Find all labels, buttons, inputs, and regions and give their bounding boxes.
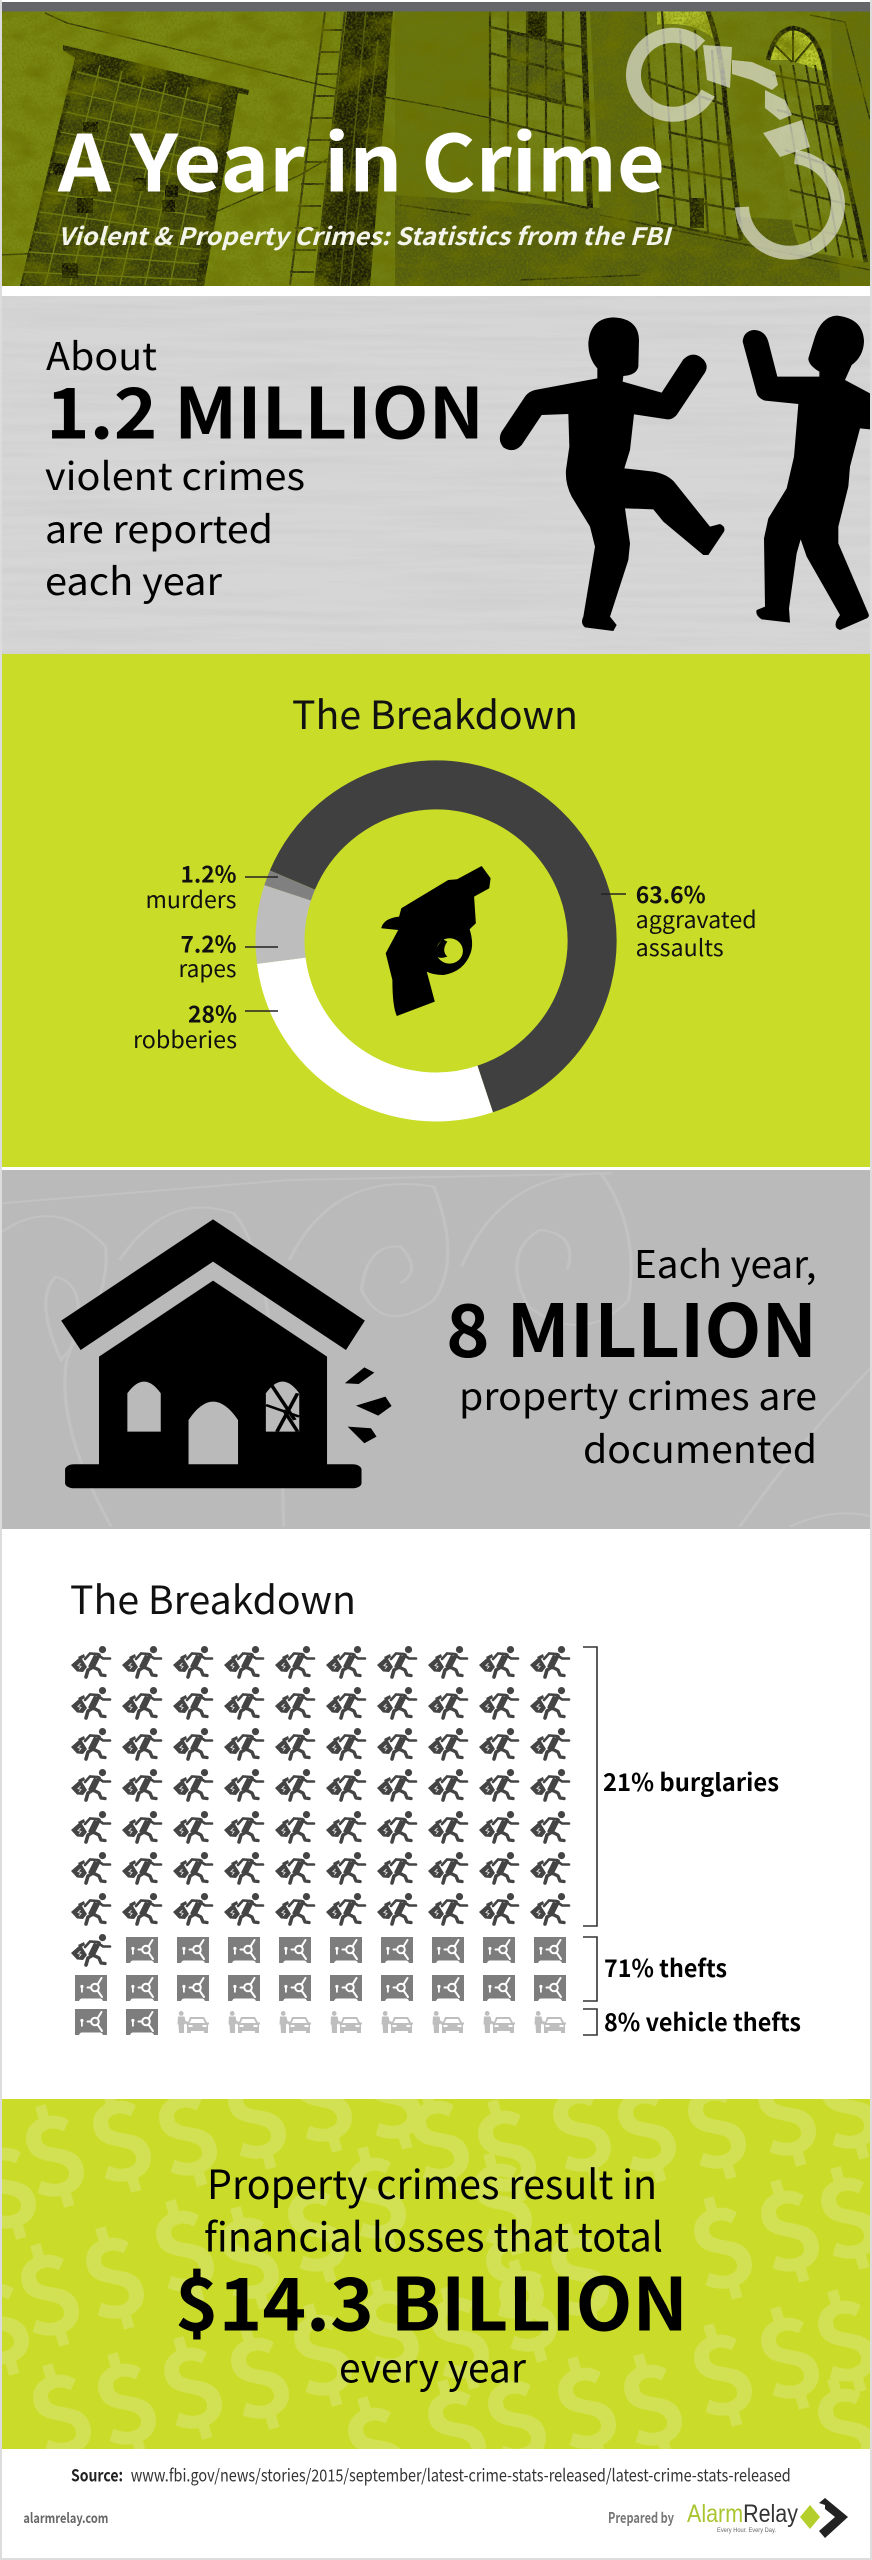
panel: financial losses: $ bbox=[61, 2188, 165, 2355]
panel: financial losses: $ bbox=[323, 2358, 427, 2525]
label: robberies: robberies bbox=[133, 1021, 237, 1055]
panel: financial losses: $ bbox=[1, 2066, 105, 2233]
text block: about 1.2 million violent crimes: are reported bbox=[45, 499, 273, 554]
label: burglaries: 21% burglaries bbox=[603, 1763, 779, 1798]
panel: financial losses: $ bbox=[599, 2315, 703, 2482]
text block: about 1.2 million violent crimes bbox=[45, 326, 484, 606]
donut chart bbox=[280, 785, 592, 1097]
icon: handcuffs bbox=[633, 35, 838, 253]
label: aggravated assaults: aggravated bbox=[636, 901, 757, 935]
panel: financial losses: $ bbox=[139, 2298, 243, 2465]
panel: financial losses: $ bbox=[203, 2028, 307, 2195]
top gray bar bbox=[0, 2, 872, 12]
text block: 14.3 billion: financial losses that total bbox=[204, 2206, 663, 2264]
ladder and pipe bbox=[315, 11, 393, 286]
panel: financial losses: $ bbox=[736, 2141, 840, 2308]
panel: financial losses: $ bbox=[593, 2041, 697, 2208]
text block: 14.3 billion: $14.3 BILLION bbox=[175, 2247, 688, 2353]
window two bbox=[651, 116, 738, 238]
icon: revolver bbox=[381, 866, 491, 1016]
logo: AlarmRelay bbox=[687, 2498, 848, 2538]
prepared by label: Prepared by bbox=[608, 2507, 675, 2528]
heading: The Breakdown bbox=[70, 1570, 356, 1626]
panel: property crimes breakdown bbox=[70, 1570, 801, 2038]
label: rapes bbox=[178, 926, 236, 984]
text block: 14.3 billion bbox=[175, 2153, 688, 2395]
panel: financial losses: $ bbox=[733, 2025, 837, 2192]
panel: property crimes bbox=[0, 1170, 872, 1529]
panel: financial losses: $ bbox=[263, 2141, 367, 2308]
label: rapes: rapes bbox=[178, 950, 236, 984]
panel: financial losses: $ bbox=[461, 2188, 565, 2355]
panel: financial losses: $ bbox=[206, 2288, 310, 2455]
panel: financial losses: $ bbox=[131, 2161, 235, 2328]
panel: financial losses: $ bbox=[403, 2341, 507, 2508]
label: aggravated assaults bbox=[636, 876, 757, 963]
panel: financial losses: $ bbox=[533, 2318, 637, 2485]
source line: Source: bbox=[71, 2462, 123, 2487]
footer site name: alarmrelay.com bbox=[23, 2507, 108, 2527]
barred door bbox=[20, 45, 249, 286]
panel: financial losses: $ bbox=[453, 2061, 557, 2228]
text block: 14.3 billion: every year bbox=[339, 2337, 526, 2395]
icon: burgled house bbox=[61, 1219, 392, 1488]
label: thefts: 71% thefts bbox=[604, 1949, 727, 1984]
label: robberies: 28% bbox=[188, 996, 237, 1030]
brackets bbox=[583, 1647, 597, 2035]
pictogram: burglaries bbox=[71, 1646, 569, 1965]
text block: 8 million property crimes bbox=[446, 1234, 817, 1474]
text block: about 1.2 million violent crimes: 1.2 MILLION bbox=[46, 358, 484, 460]
label: murders: murders bbox=[146, 881, 236, 915]
text block: 8 million property crimes: property crimes are bbox=[459, 1366, 817, 1421]
panel: violent crimes bbox=[0, 296, 872, 655]
panel: financial losses: $ bbox=[386, 2051, 490, 2218]
window one bbox=[490, 11, 588, 208]
panel: financial losses: $ bbox=[339, 2008, 443, 2175]
panel: financial losses bbox=[2, 2099, 870, 2449]
panel: financial losses: $ bbox=[8, 2325, 112, 2492]
icon: two fighting figures bbox=[500, 316, 870, 631]
text block: 8 million property crimes: documented bbox=[583, 1419, 817, 1474]
panel: financial losses: $ bbox=[669, 2158, 773, 2325]
panel: financial losses: $ bbox=[336, 2241, 440, 2408]
label: vehicle thefts: 8% vehicle thefts bbox=[604, 2003, 801, 2038]
subtitle: Violent & Property Crimes: Statistics from the FBI bbox=[58, 217, 673, 252]
logo: AlarmRelay: Every Hour. Every Day. bbox=[717, 2528, 776, 2534]
panel: financial losses: $ bbox=[269, 2265, 373, 2432]
panel: financial losses: $ bbox=[474, 2221, 578, 2388]
panel: financial losses: $ bbox=[669, 2285, 773, 2452]
panel: financial losses: $ bbox=[73, 2314, 177, 2481]
pictogram: thefts bbox=[75, 1937, 566, 2035]
panel: financial losses: $ bbox=[526, 2185, 630, 2352]
panel: financial losses: $ bbox=[134, 2045, 238, 2212]
logo: AlarmRelay: AlarmRelay bbox=[687, 2500, 798, 2528]
wall texture bbox=[0, 11, 872, 286]
text block: 8 million property crimes: Each year, bbox=[634, 1234, 816, 1289]
panel: financial losses: $ bbox=[68, 2051, 172, 2218]
text block: 14.3 billion: Property crimes result in bbox=[207, 2153, 657, 2211]
panel: violent crimes breakdown bbox=[0, 654, 872, 1167]
panel: financial losses: $ bbox=[528, 2041, 632, 2208]
text block: about 1.2 million violent crimes: violent crimes bbox=[45, 446, 305, 501]
wall cracks bbox=[0, 13, 870, 280]
heading: The Breakdown bbox=[292, 685, 578, 741]
label: rapes: 7.2% bbox=[180, 926, 236, 960]
panel: financial losses: $ bbox=[449, 2114, 553, 2281]
panel: financial losses: $ bbox=[736, 2268, 840, 2435]
label: aggravated assaults: 63.6% bbox=[636, 876, 706, 910]
panel: financial losses: $ bbox=[663, 2038, 767, 2205]
panel: header photo banner bbox=[0, 11, 872, 286]
panel: financial losses: $ bbox=[463, 2331, 567, 2498]
label: robberies bbox=[133, 996, 237, 1055]
panel: financial losses: $ bbox=[196, 2168, 300, 2335]
text block: 8 million property crimes: 8 MILLION bbox=[446, 1273, 817, 1379]
label: murders bbox=[146, 856, 236, 915]
label: aggravated assaults: assaults bbox=[636, 929, 724, 963]
label: murders: 1.2% bbox=[180, 856, 236, 890]
panel: financial losses: $ bbox=[323, 2108, 427, 2275]
title: A Year in Crime bbox=[57, 102, 665, 214]
leader lines bbox=[245, 877, 626, 1011]
pictogram: vehicle thefts bbox=[178, 2011, 566, 2033]
text block: about 1.2 million violent crimes: each year bbox=[45, 551, 222, 606]
panel: financial losses: $ bbox=[406, 2248, 510, 2415]
window three bbox=[792, 126, 864, 262]
panel: financial losses: $ bbox=[269, 2011, 373, 2178]
text block: about 1.2 million violent crimes: About bbox=[46, 326, 157, 381]
